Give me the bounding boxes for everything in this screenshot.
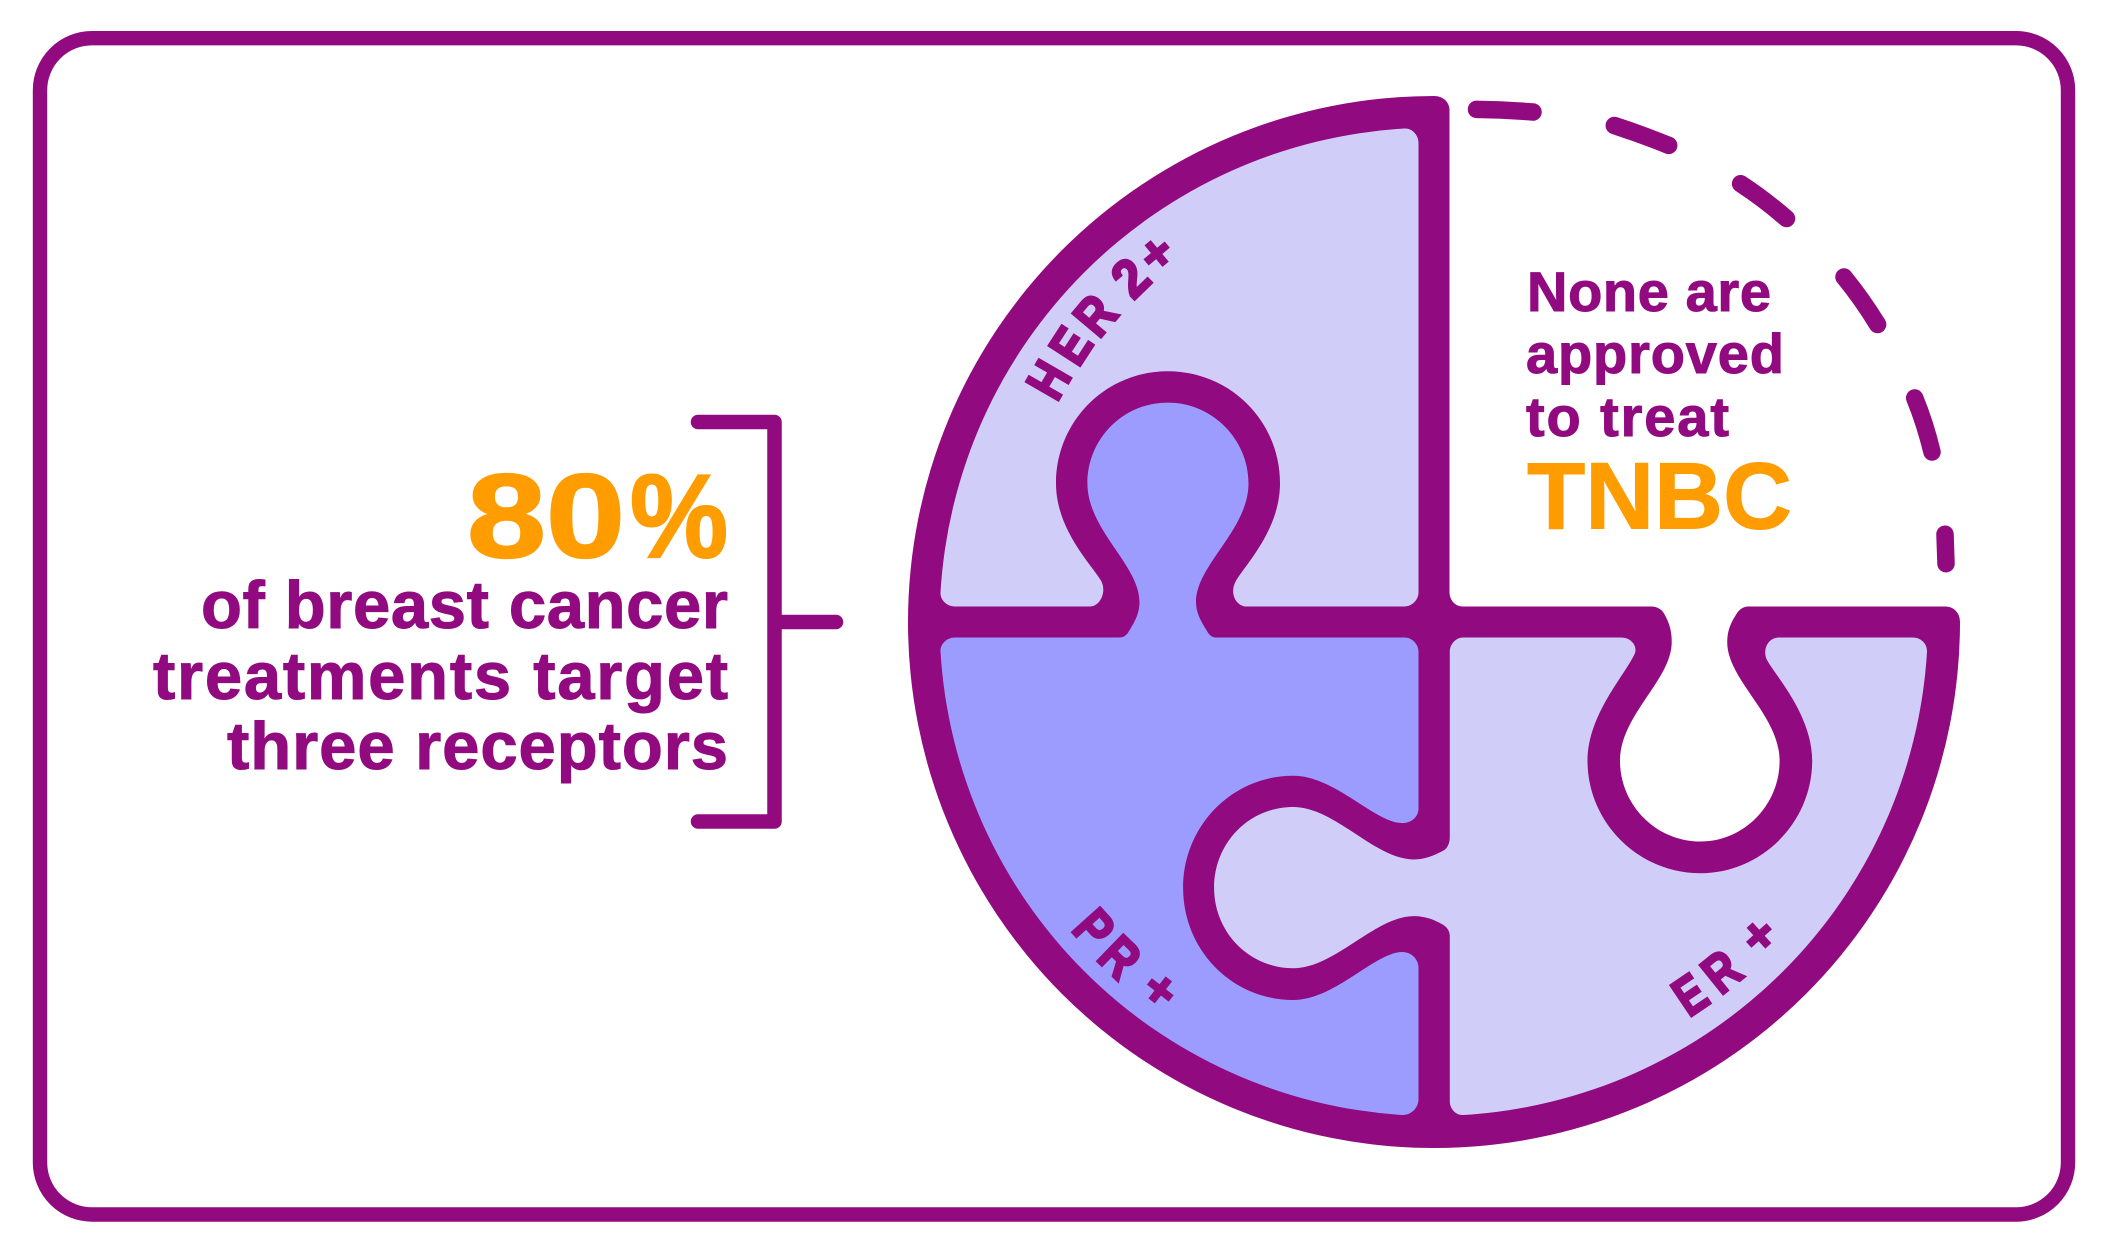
text block: none are approved to treat TNBC: approved	[1526, 322, 1784, 385]
label: PR+: P	[1061, 898, 1126, 960]
label: HER 2+: 2	[1100, 247, 1162, 309]
label: HER 2+	[1015, 222, 1186, 409]
puzzle piece: PR+	[940, 403, 1418, 1115]
label: HER 2+: R	[1062, 284, 1129, 348]
caption: of breast cancer treatments target three receptors	[153, 568, 728, 784]
caption: of breast cancer treatments target three receptors: three receptors	[227, 709, 728, 784]
label: PR+: +	[1132, 959, 1189, 1021]
text block: none are approved to treat TNBC: None are	[1527, 260, 1771, 323]
label: ER+: R	[1690, 939, 1753, 1005]
label: ER+	[1662, 905, 1788, 1028]
text block: none are approved to treat TNBC: to treat	[1526, 385, 1729, 448]
text block: none are approved to treat TNBC	[1526, 260, 1792, 550]
dashed arc: missing TNBC puzzle piece	[1476, 109, 1946, 564]
label: HER 2+: H	[1015, 351, 1083, 409]
big number: 80%	[467, 450, 728, 583]
label: PR+	[1061, 898, 1189, 1021]
label: HER 2+: E	[1038, 317, 1105, 375]
label: PR+: R	[1087, 924, 1152, 991]
label: ER+: +	[1729, 905, 1788, 966]
caption: of breast cancer treatments target three receptors: treatments target	[153, 639, 728, 714]
puzzle piece: HER 2+	[940, 128, 1418, 607]
caption: of breast cancer treatments target three receptors: of breast cancer	[201, 568, 728, 643]
puzzle piece: ER+	[1214, 638, 1927, 1115]
big number: 80%: 80	[467, 450, 625, 583]
text block: 80% statistic	[153, 450, 728, 784]
puzzle: circular receptor jigsaw	[908, 96, 1960, 1148]
big number: 80%: %	[630, 450, 728, 583]
highlight: TNBC: TNBC	[1527, 444, 1792, 550]
label: ER+: E	[1662, 962, 1719, 1028]
bracket connecting the statistic to the puzzle	[698, 422, 836, 822]
puzzle outline	[908, 96, 1960, 1148]
label: HER 2+: +	[1127, 222, 1186, 284]
